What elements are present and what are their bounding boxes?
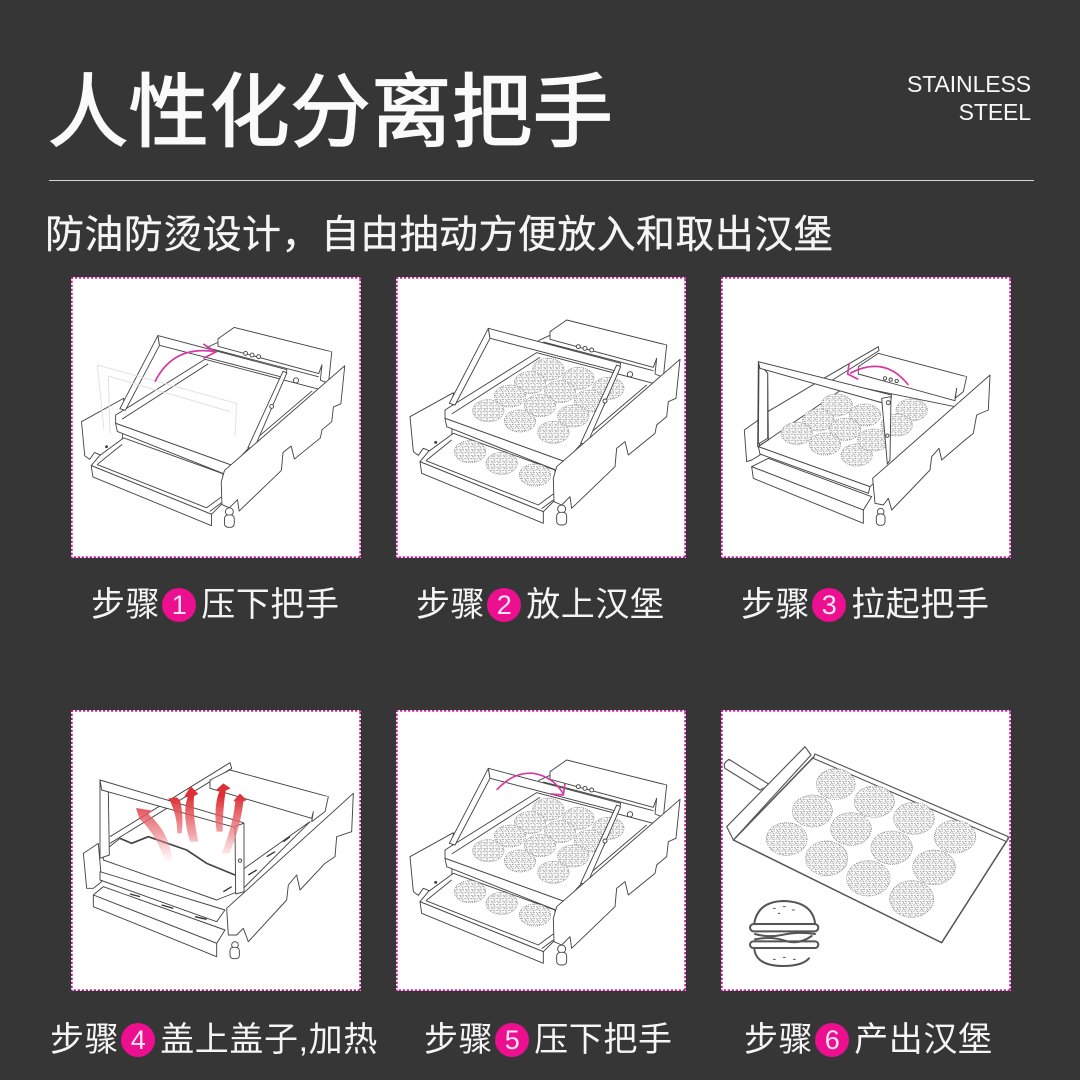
caption: step 1: 步骤 [91,586,160,624]
machine illustration with heat arrows [71,710,361,991]
caption: step 2 [416,586,665,624]
brand text: stainless steel [907,71,1031,125]
header rule [49,180,1034,181]
caption: step 5 [424,1021,673,1059]
machine illustration with ghost handle and arrow [71,277,361,558]
caption: step 4: 4 [131,1025,146,1055]
panel: step 2 place burgers [396,277,686,558]
icon: burger [750,901,818,966]
caption: step 2: 2 [497,590,512,620]
caption: step 5: 压下把手 [534,1021,673,1059]
caption: step 6: 产出汉堡 [854,1021,993,1059]
caption: step 3: 3 [822,590,837,620]
caption: step 5: 步骤 [424,1021,493,1059]
caption: step 3: 步骤 [741,586,810,624]
caption: step 1: 压下把手 [201,586,340,624]
caption: step 1 [91,586,340,624]
caption: step 3 [741,586,990,624]
brand text: stainless steel: STAINLESS [907,71,1031,97]
caption: step 6: 步骤 [744,1021,813,1059]
caption: step 2: 步骤 [416,586,485,624]
caption: step 4 [50,1021,378,1059]
subtitle: 防油防烫设计，自由抽动方便放入和取出汉堡 [45,204,833,260]
caption: step 6 [744,1021,993,1059]
caption: step 6: 6 [825,1025,840,1055]
machine illustration with buns [396,277,686,558]
title: 人性化分离把手 [48,48,614,164]
machine illustration with buns and arrow [396,710,686,991]
caption: step 2: 放上汉堡 [526,586,665,624]
caption: step 5: 5 [505,1025,520,1055]
machine illustration with raised handle [721,277,1011,558]
caption: step 3: 拉起把手 [851,586,990,624]
panel: step 1 press handle [71,277,361,558]
panel: step 6 finished burgers [721,710,1011,991]
brand text: stainless steel: STEEL [959,99,1031,125]
tray of buns and burger icon [721,710,1011,991]
panel: step 4 close lid and heat [71,710,361,991]
caption: step 4: 盖上盖子,加热 [160,1021,378,1059]
icon: heat arrows [136,783,247,863]
caption: step 4: 步骤 [50,1021,119,1059]
panel: step 5 press handle [396,710,686,991]
caption: step 1: 1 [172,590,187,620]
panel: step 3 lift handle [721,277,1011,558]
